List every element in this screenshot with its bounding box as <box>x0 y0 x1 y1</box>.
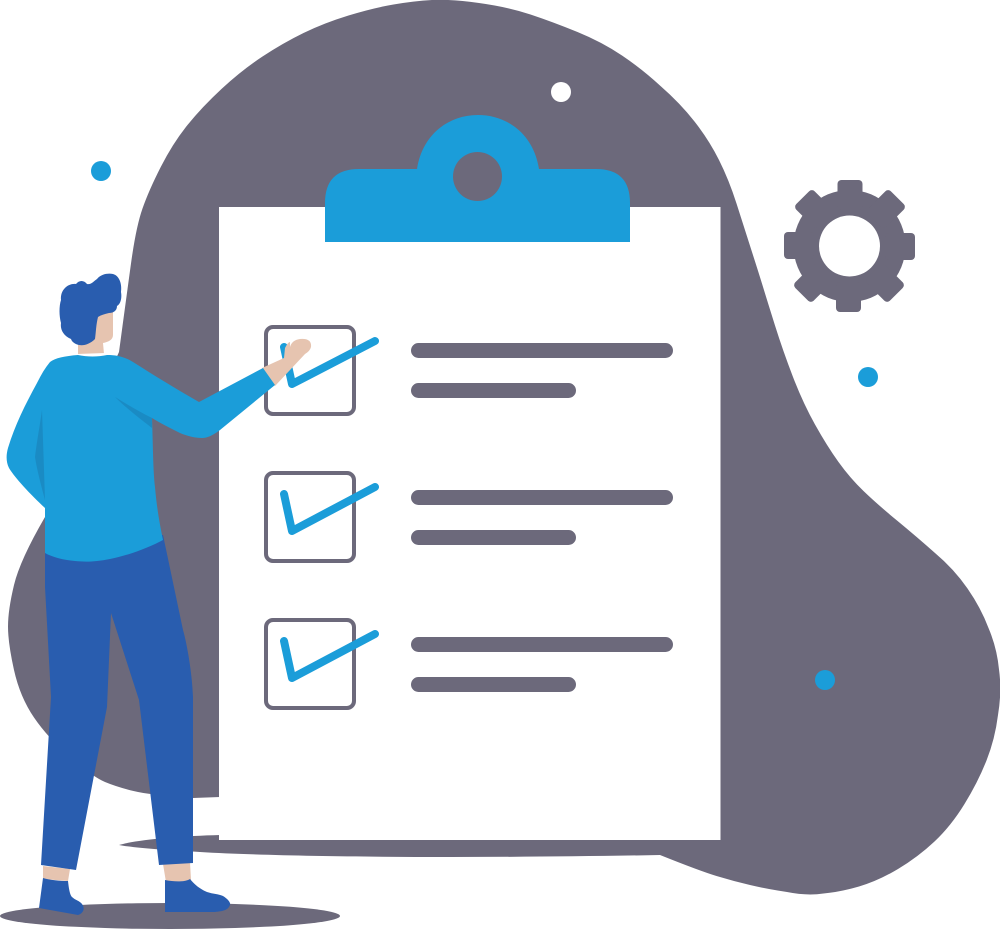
trousers <box>41 535 193 870</box>
right shoe <box>165 879 230 912</box>
decorative dot: right blue <box>858 367 878 387</box>
ground shadow <box>0 903 340 929</box>
clipboard clip <box>325 115 630 242</box>
hair <box>60 274 121 345</box>
collar <box>77 353 105 357</box>
ankles <box>43 862 191 882</box>
decorative dot: lower right blue <box>815 670 835 690</box>
decorative dot: top white <box>551 82 571 102</box>
checklist row 3 <box>266 620 673 708</box>
hand <box>262 339 311 386</box>
paper sheet <box>219 207 720 840</box>
sweater shading: side <box>35 410 45 500</box>
icon: gear <box>784 180 915 312</box>
checklist row 1 <box>266 327 673 414</box>
decorative dot: left blue <box>91 161 111 181</box>
checklist row 2 <box>266 473 673 561</box>
left shoe <box>39 878 84 915</box>
clip hole <box>453 152 502 201</box>
sweater shading: arm <box>115 397 152 428</box>
sweater with arm <box>7 355 275 562</box>
clipboard panel <box>219 115 720 840</box>
neck and ear <box>78 310 113 356</box>
person <box>7 274 311 915</box>
